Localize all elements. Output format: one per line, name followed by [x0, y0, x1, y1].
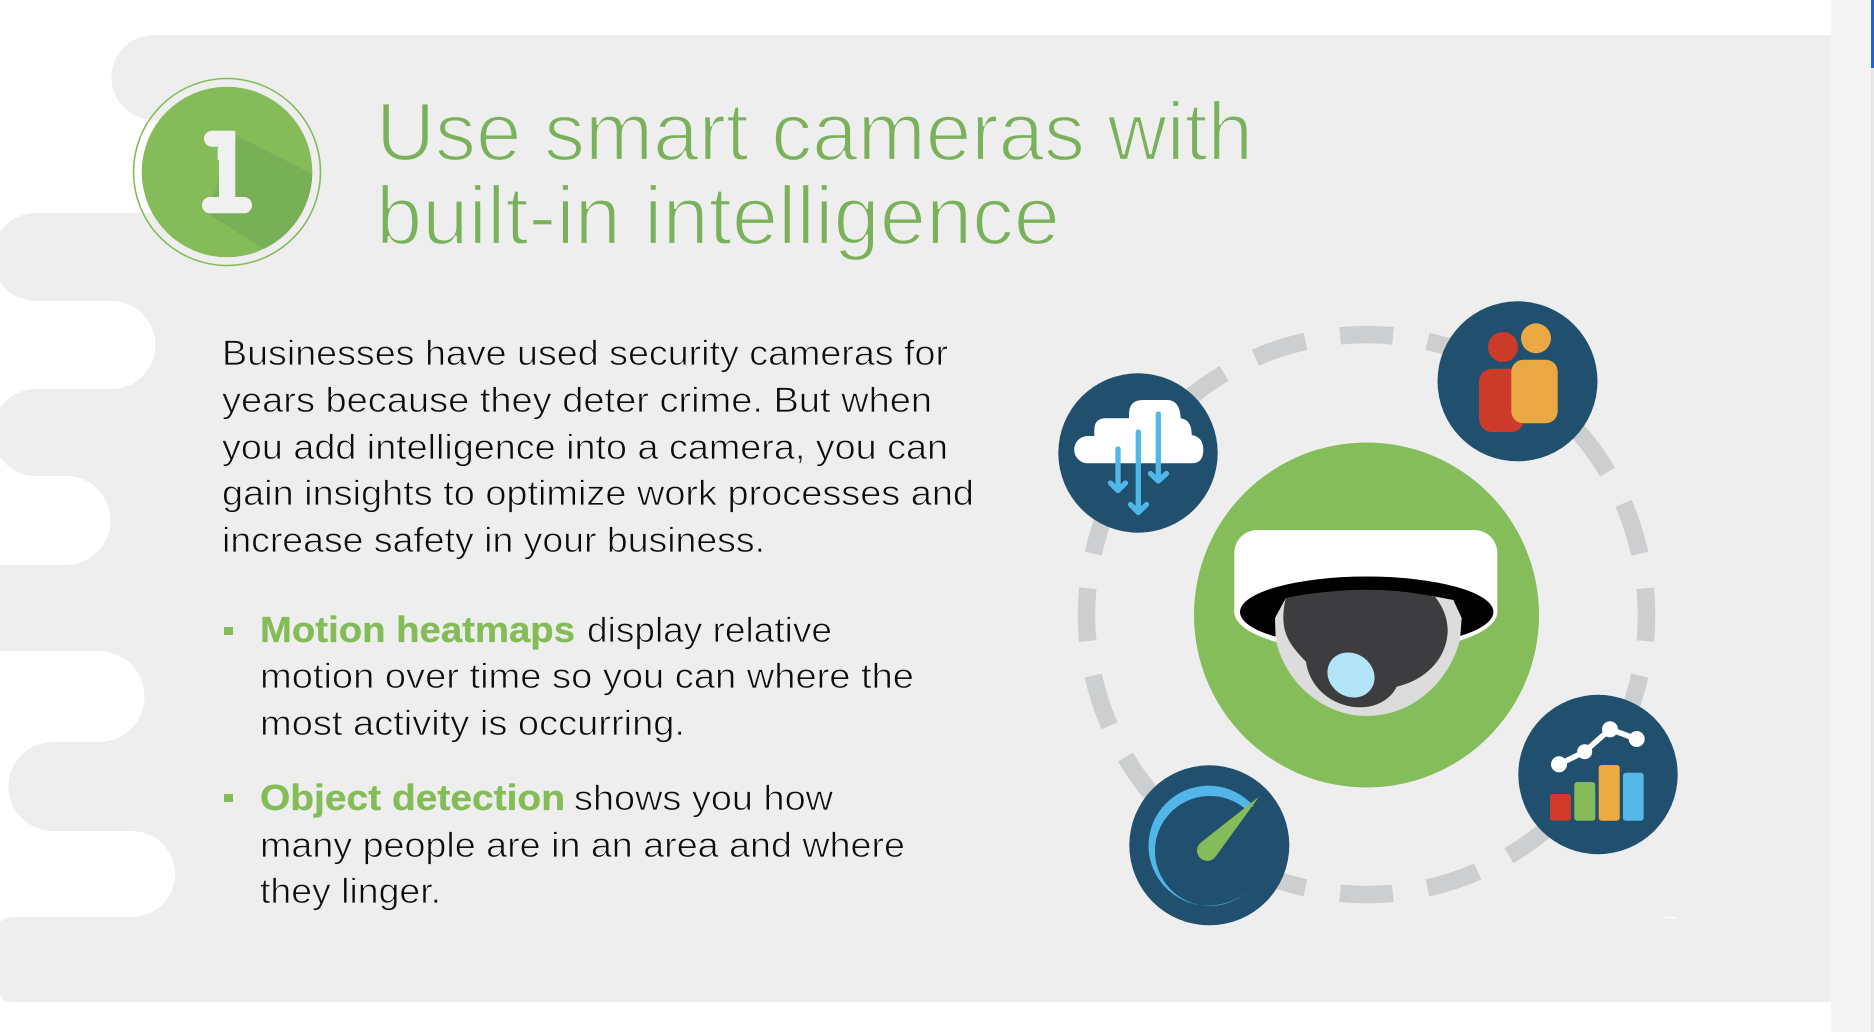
icon: people	[1438, 301, 1598, 461]
bullet: motion heatmaps	[224, 609, 914, 743]
number 1	[202, 115, 252, 248]
green disc	[1194, 442, 1539, 788]
intro text block: years because they deter crime. But when	[222, 380, 932, 420]
intro text block: Businesses have used security cameras for	[222, 333, 948, 373]
right sidebar	[1831, 0, 1874, 1032]
lens	[1319, 643, 1383, 707]
intro text block: gain insights to optimize work processes and	[222, 473, 974, 513]
lens housing	[1283, 590, 1448, 707]
icon: speed gauge	[1129, 765, 1289, 925]
bullet: object detection	[224, 777, 905, 911]
bullet: object detection: many people are in an area and where	[260, 825, 905, 865]
bullet: motion heatmaps: display relative	[587, 610, 832, 650]
dome	[1275, 591, 1462, 716]
bullet: object detection: they linger.	[260, 871, 441, 911]
dashed orbit ring	[1086, 335, 1646, 895]
icon: bar and line chart	[1518, 695, 1678, 854]
title	[376, 85, 1253, 262]
central camera illustration	[1194, 442, 1539, 788]
title: Use smart cameras with	[376, 85, 1253, 178]
small white mark	[1663, 917, 1676, 918]
bullet: motion heatmaps: most activity is occurring.	[260, 703, 685, 743]
number 1: 1	[215, 115, 239, 248]
intro text block: increase safety in your business.	[222, 520, 765, 560]
bullet: object detection: Object detection	[260, 777, 565, 818]
bullet: motion heatmaps: Motion heatmaps	[260, 609, 575, 650]
title: built-in intelligence	[376, 169, 1060, 262]
icon: cloud download	[1058, 373, 1218, 533]
camera opening	[1240, 576, 1493, 648]
number badge	[134, 78, 320, 266]
bullet: object detection: shows you how	[574, 778, 833, 818]
bullet: motion heatmaps: motion over time so you can where the	[260, 656, 914, 696]
intro text block	[222, 333, 974, 560]
camera housing	[1234, 530, 1497, 653]
intro text block: you add intelligence into a camera, you can	[222, 427, 948, 467]
